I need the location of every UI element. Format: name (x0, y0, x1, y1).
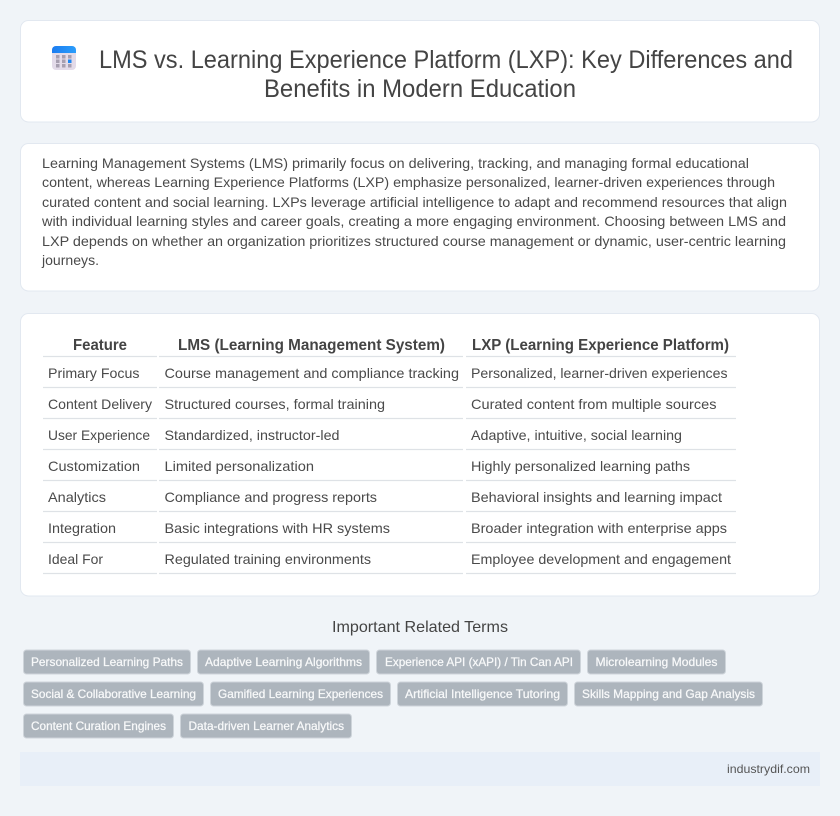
heading: Benefits in Modern Education (264, 75, 576, 103)
tag (398, 682, 568, 706)
tag (24, 714, 174, 738)
row: analytics: Analytics (48, 489, 106, 505)
tag: Personalized Learning Paths (31, 655, 183, 669)
row: primary focus (48, 365, 728, 381)
tag (588, 650, 726, 674)
text block: summary paragraph: journeys. (41, 252, 99, 268)
row: ideal for: Employee development and engagement (471, 551, 731, 567)
tag (574, 682, 762, 706)
tag (376, 650, 580, 674)
tag (198, 650, 370, 674)
tag: Social & Collaborative Learning (31, 687, 196, 701)
table header: LXP (Learning Experience Platform) (472, 337, 729, 354)
tag: Data-driven Learner Analytics (188, 719, 344, 733)
row: ideal for: Ideal For (48, 551, 103, 567)
row: user experience (48, 427, 682, 443)
row: content delivery: Content Delivery (48, 396, 152, 412)
tag (24, 682, 204, 706)
tag (210, 682, 390, 706)
tag: Gamified Learning Experiences (218, 687, 383, 701)
row: ideal for: Regulated training environments (164, 551, 371, 567)
text block: summary paragraph: Learning Management Systems (LMS) primarily focus on delivering, tracking, and managing formal educational (42, 155, 749, 171)
row: user experience: Adaptive, intuitive, social learning (471, 427, 682, 443)
tag: Artificial Intelligence Tutoring (405, 687, 560, 701)
tag: Adaptive Learning Algorithms (205, 655, 362, 669)
row: analytics (48, 489, 722, 505)
heading: LMS vs. Learning Experience Platform (LXP): Key Differences and (99, 46, 793, 74)
row: customization: Highly personalized learning paths (471, 458, 690, 474)
tag: Experience API (xAPI) / Tin Can API (385, 655, 573, 669)
table header: Feature (73, 337, 127, 354)
panel: summary (20, 144, 820, 291)
table header (73, 337, 729, 354)
row: user experience: User Experience (48, 427, 150, 443)
row: primary focus: Course management and compliance tracking (164, 365, 459, 381)
text block: summary paragraph: content, whereas Learning Experience Platforms (LXP) emphasize personalized, learner-driven experiences through (42, 174, 775, 190)
tag (180, 714, 352, 738)
row: user experience: Standardized, instructor-led (164, 427, 340, 443)
panel: comparison table (20, 314, 820, 596)
row: analytics: Compliance and progress reports (164, 489, 377, 505)
footer: industrydif.com (727, 762, 810, 776)
tag (24, 650, 190, 674)
row: ideal for (48, 551, 731, 567)
icon: calendar (52, 46, 76, 70)
panel: related term tags (24, 650, 762, 738)
tag: Content Curation Engines (31, 719, 166, 733)
row: integration: Integration (48, 520, 116, 536)
heading (99, 46, 793, 103)
text block: summary paragraph: with individual learning styles and career goals, creating a more engaging environment. Choosing between LMS and (41, 213, 786, 229)
row: analytics: Behavioral insights and learning impact (471, 489, 722, 505)
row: content delivery: Structured courses, formal training (164, 396, 385, 412)
text block: summary paragraph: LXP depends on whether an organization prioritizes structured course management or dynamic, user-centric learning (42, 233, 786, 249)
heading: related terms: Important Related Terms (332, 619, 508, 636)
row: customization (48, 458, 690, 474)
panel: title (20, 20, 820, 122)
row: primary focus: Primary Focus (48, 365, 140, 381)
row: integration: Broader integration with enterprise apps (471, 520, 727, 536)
row: customization: Limited personalization (164, 458, 314, 474)
row: content delivery (48, 396, 716, 412)
row: integration (48, 520, 727, 536)
row: integration: Basic integrations with HR systems (164, 520, 390, 536)
row: customization: Customization (48, 458, 140, 474)
text block: summary paragraph: curated content and social learning. LXPs leverage artificial intelligence to adapt and recommend resources that align (42, 194, 787, 210)
tag: Skills Mapping and Gap Analysis (582, 687, 755, 701)
text block: summary paragraph (41, 155, 787, 268)
tag: Microlearning Modules (596, 655, 718, 669)
row: primary focus: Personalized, learner-driven experiences (471, 365, 728, 381)
row: content delivery: Curated content from multiple sources (471, 396, 716, 412)
table header: LMS (Learning Management System) (178, 337, 445, 354)
footer (20, 752, 820, 786)
